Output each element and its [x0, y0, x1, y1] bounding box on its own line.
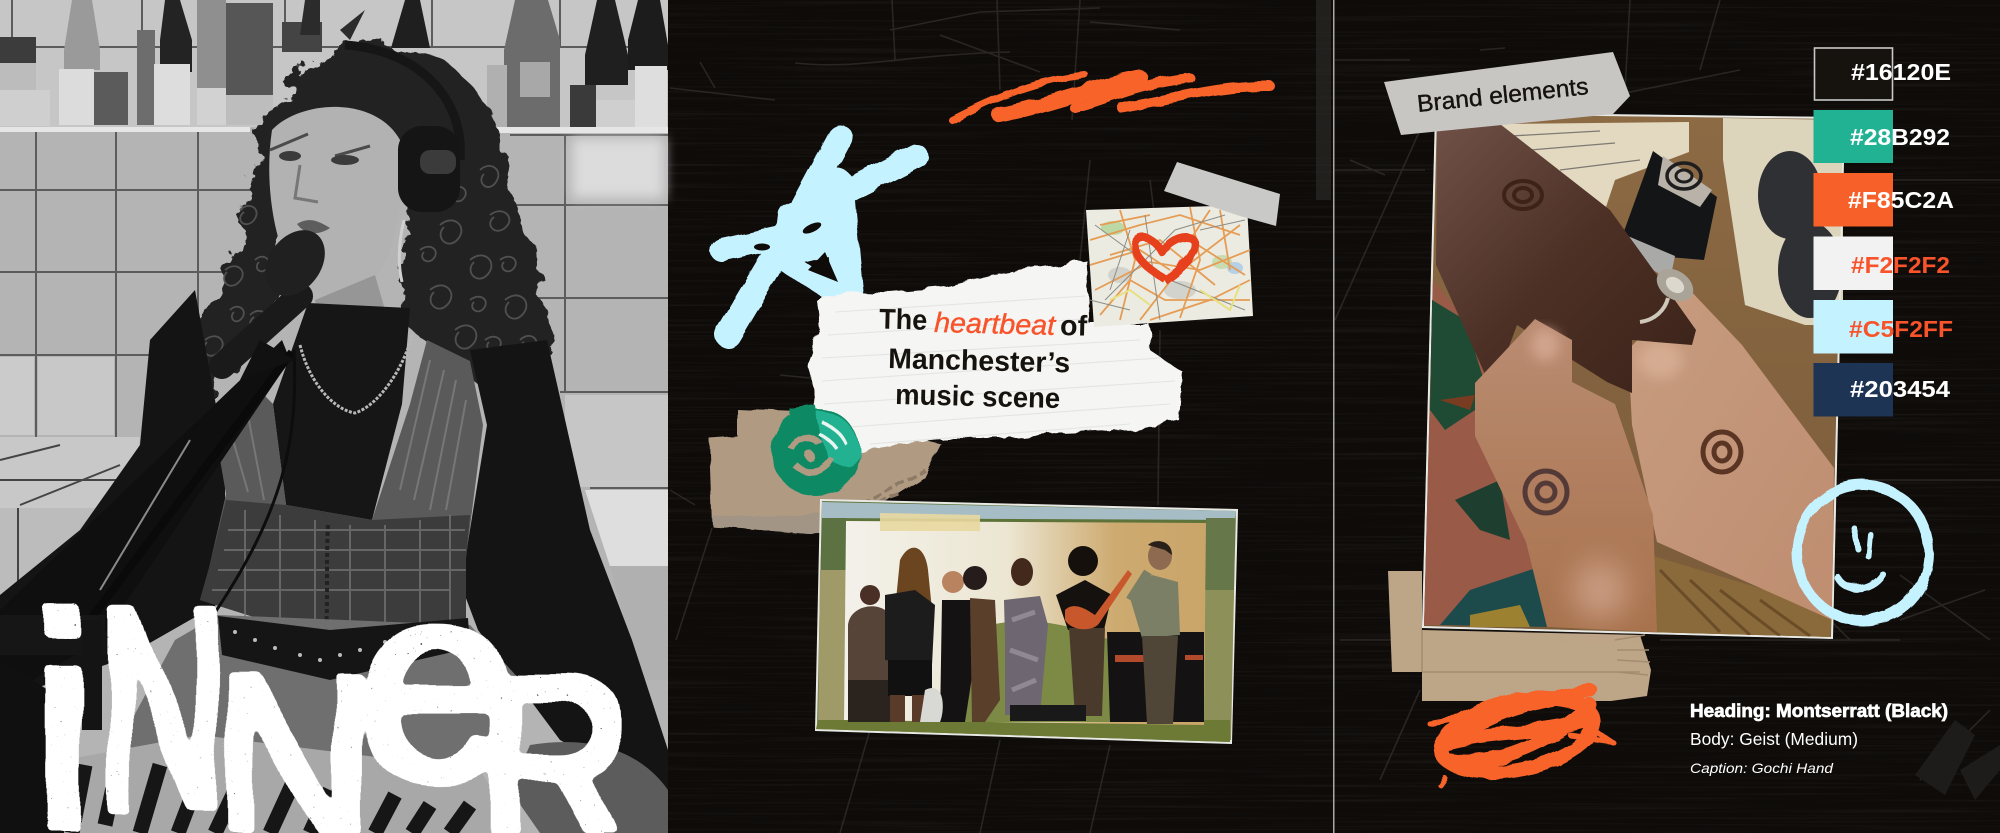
panel divider — [1333, 0, 1334, 833]
swatch F85C2A — [1814, 173, 1954, 226]
photo: striped vest — [200, 340, 483, 638]
map scrap — [1086, 205, 1253, 327]
photo: woman's hair — [190, 45, 555, 395]
stage monitor — [1010, 705, 1086, 721]
swatch 203454 — [1814, 363, 1950, 416]
photo: dark hand — [1436, 124, 1696, 393]
white overlay border — [1423, 113, 1844, 638]
photo: curl highlights — [204, 166, 537, 356]
swatch 28B292 — [1814, 110, 1950, 163]
panel: brand elements — [1335, 0, 2000, 800]
band photo — [816, 500, 1237, 743]
torn lined paper — [808, 260, 1183, 452]
type specimen — [1690, 701, 1948, 776]
cardboard scrap — [709, 409, 941, 534]
photo: paper — [1500, 122, 1689, 207]
headline line 1: of — [1060, 310, 1088, 343]
swatch C5F2FF: #C5F2FF — [1849, 316, 1953, 342]
backing singer — [963, 566, 1000, 722]
photo: keyboard — [64, 735, 668, 833]
swatch F85C2A: #F85C2A — [1848, 187, 1954, 213]
heart doodle — [1136, 237, 1195, 280]
chalkboard scratches — [1335, 0, 2000, 780]
headline line 1: The — [879, 304, 928, 337]
photo: centre hand — [1475, 319, 1657, 632]
caption font note: Caption: Gochi Hand — [1690, 760, 1834, 776]
photo: tiled wall — [0, 0, 668, 833]
photo: headphones — [345, 45, 460, 282]
swatch F2F2F2 — [1814, 236, 1950, 290]
worn edge — [1316, 0, 1331, 200]
photo: tray — [1723, 118, 1843, 325]
photo: shelf bottles and candles — [0, 0, 668, 127]
heading font note: Heading: Montserratt (Black) — [1690, 701, 1948, 721]
colour palette — [1814, 48, 1954, 416]
headline — [879, 304, 1088, 415]
synth keyboard — [1107, 632, 1204, 722]
photo: microphone and stand — [0, 219, 337, 833]
photo: counter — [0, 437, 668, 680]
photo: black cardigan — [0, 290, 668, 800]
cardboard tape — [1388, 571, 1651, 701]
swatch 16120E — [1814, 48, 1951, 100]
photo: woman's face — [269, 107, 402, 325]
swatch F2F2F2: #F2F2F2 — [1851, 252, 1950, 278]
headline line 3: music scene — [895, 379, 1061, 415]
singer in black dress — [940, 571, 980, 722]
smiley doodle — [1797, 485, 1929, 621]
photo: ring — [1640, 262, 1699, 322]
worn corner texture — [1915, 720, 2000, 800]
photo: stamp — [1618, 151, 1717, 280]
singer in patterned dress — [1004, 558, 1048, 715]
grey tape — [1164, 162, 1280, 226]
photo: black top — [273, 303, 410, 520]
yellow tape — [880, 513, 980, 531]
photo: spiral stamps — [1504, 181, 1741, 513]
swatch 16120E: #16120E — [1851, 59, 1951, 85]
panel: cover photo — [0, 0, 668, 833]
guitarist — [1056, 546, 1132, 716]
orange scribble — [1428, 686, 1612, 785]
headline line 2: Manchester’s — [888, 343, 1071, 379]
swatch C5F2FF — [1814, 300, 1953, 354]
photo: right hand — [1628, 287, 1834, 620]
photo: yarn basket — [1640, 555, 1832, 637]
photo backdrop — [844, 521, 1206, 725]
photo: studded belt — [218, 616, 470, 680]
star doodle — [722, 138, 916, 335]
logo wordmark — [28, 560, 632, 833]
photo: necklace — [300, 335, 412, 413]
male singer — [1130, 541, 1180, 724]
brand elements tape — [1384, 52, 1630, 135]
chalkboard scratches — [670, 0, 1180, 833]
panel: headline collage — [670, 0, 1331, 833]
body font note: Body: Geist (Medium) — [1690, 729, 1858, 749]
hands photo — [1423, 113, 1844, 638]
spiral sticker — [772, 408, 860, 496]
star holes — [754, 220, 838, 282]
brand elements tape: Brand elements — [1416, 73, 1590, 118]
swatch 203454: #203454 — [1850, 376, 1950, 402]
headline line 1 — [879, 304, 1088, 343]
photo: jeans — [110, 615, 520, 760]
photo: sunglasses — [1758, 151, 1842, 318]
photo: rug — [1424, 280, 1570, 627]
swatch 28B292: #28B292 — [1850, 124, 1950, 150]
orange scribble — [952, 75, 1270, 120]
photo sky — [822, 502, 1236, 520]
headline line 1: heartbeat — [934, 307, 1057, 341]
drum — [920, 688, 943, 722]
singer in leather jacket — [885, 548, 935, 722]
seated musician — [848, 585, 892, 722]
